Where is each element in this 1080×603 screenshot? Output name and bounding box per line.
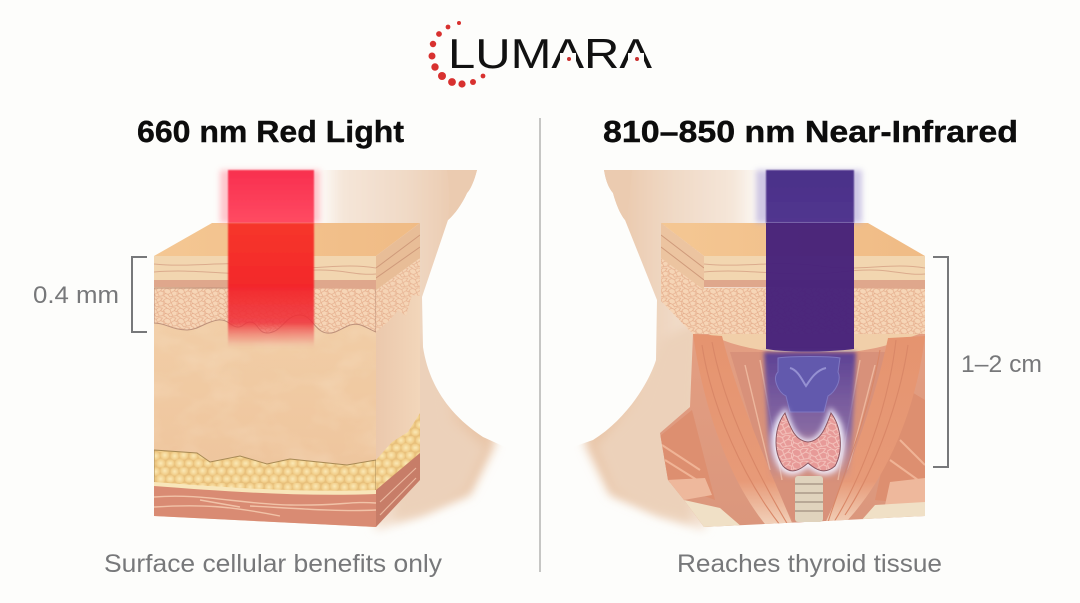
red beam above skin: [220, 170, 320, 223]
neck silhouette: [580, 170, 756, 532]
red beam inside skin: [228, 223, 314, 348]
purple beam glow: [756, 170, 862, 223]
neck silhouette: [324, 170, 500, 532]
left sternocleidomastoid muscle: [693, 334, 795, 530]
muscle region: [660, 334, 925, 527]
bracket: 1–2 cm: [933, 257, 948, 467]
larynx: [776, 356, 840, 412]
skin block front face: [154, 256, 376, 530]
label: 0.4 mm: 0.4 mm: [33, 282, 119, 309]
bracket: 0.4 mm: [132, 257, 147, 332]
label: 1–2 cm: 1–2 cm: [961, 351, 1042, 378]
panel: red light skin diagram: [34, 167, 500, 532]
logo accent: A crossbar dots: [560, 53, 644, 61]
logo: Lumara: [428, 21, 652, 88]
tissue block front face: [704, 256, 925, 334]
muscle layer: [154, 486, 376, 530]
skin block top face: [154, 223, 420, 256]
clavicle band: [684, 500, 925, 527]
heading: near-infrared: 810–850 nm Near-Infrared: [603, 114, 1018, 149]
fading beam below tissue: [764, 352, 856, 480]
caption: surface benefits: Surface cellular benefits only: [104, 550, 443, 578]
logo dot arc: [428, 21, 485, 88]
caption: reaches thyroid: Reaches thyroid tissue: [677, 550, 942, 578]
purple beam inside tissue: [766, 223, 854, 352]
logo wordmark: LUMARA: [448, 30, 652, 77]
epidermis cell layer: [154, 288, 376, 333]
lower side muscles: [660, 410, 715, 500]
fat layer: [154, 450, 376, 492]
thyroid glow: [774, 412, 842, 472]
stratum layer: [704, 256, 925, 280]
trachea: [795, 476, 823, 522]
centre divider: [539, 118, 541, 572]
epidermis lower edge and dermal arc: [708, 334, 919, 352]
skin block side face: [376, 223, 420, 533]
heading: red light: 660 nm Red Light: [137, 114, 404, 149]
tissue block top face: [661, 223, 925, 256]
thyroid gland: [776, 413, 840, 471]
panel: near-infrared thyroid diagram: [580, 167, 1040, 532]
tissue block side face: [661, 223, 704, 335]
right sternocleidomastoid muscle: [822, 336, 925, 530]
centre neck strap muscles: [730, 352, 890, 525]
purple beam above tissue: [766, 170, 854, 223]
fascia band: [154, 482, 376, 496]
stratum layer: [154, 256, 376, 284]
larynx notch: [790, 368, 826, 386]
